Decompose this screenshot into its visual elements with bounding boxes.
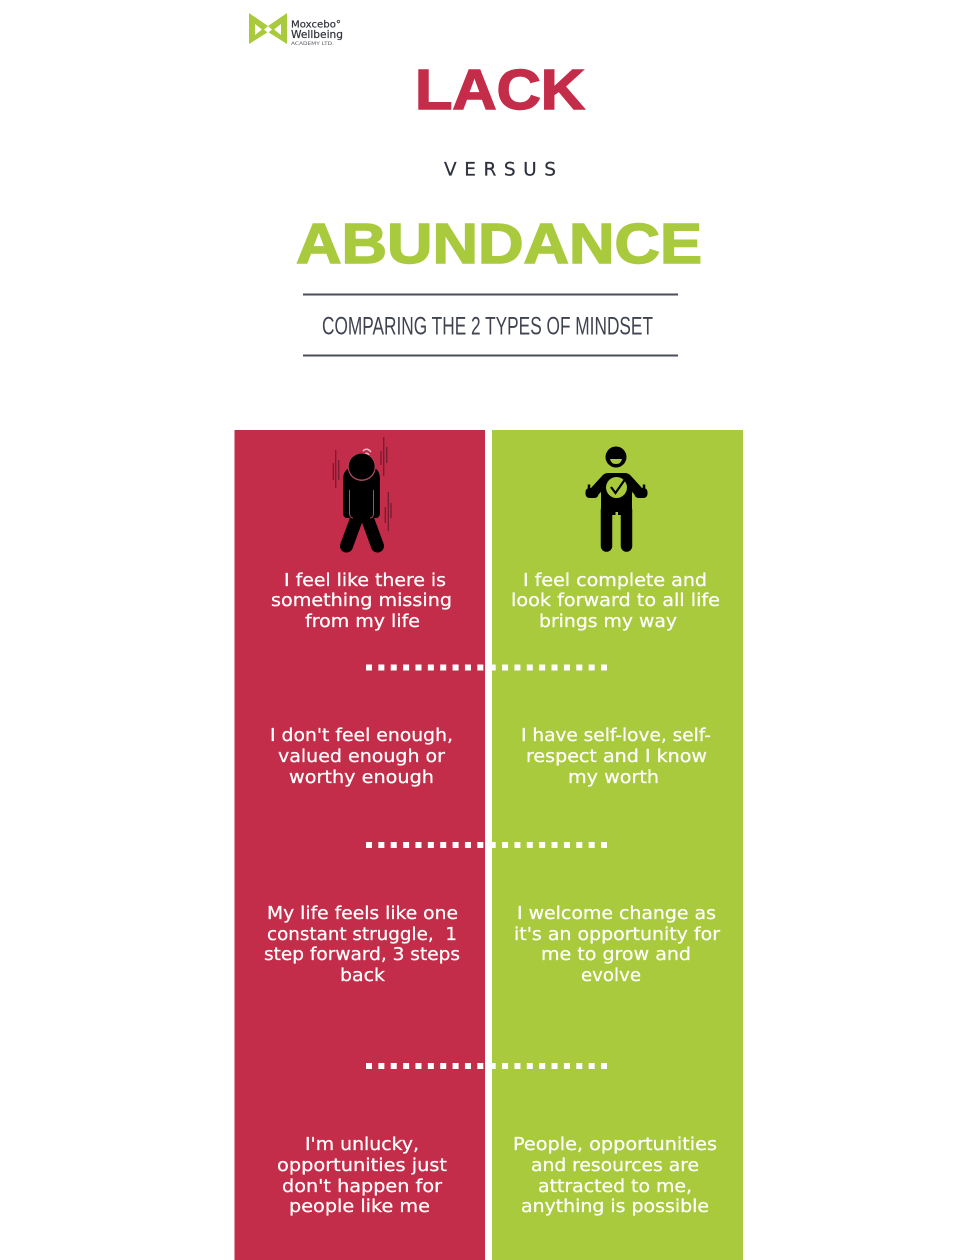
panel: abundance column: [492, 430, 743, 1260]
text: abundance statement 3: I welcome change as: [517, 904, 716, 924]
text: abundance statement 2: [521, 726, 711, 788]
text: lack statement 1: [271, 571, 452, 632]
text: abundance statement 4: [513, 1135, 717, 1217]
subtitle: COMPARING THE 2 TYPES OF MINDSET: [322, 312, 653, 340]
text: lack statement 2: valued enough or: [278, 747, 446, 767]
divider: dotted row 3: [366, 1063, 607, 1069]
text: lack statement 2: worthy enough: [289, 768, 434, 788]
text: abundance statement 4: and resources are: [531, 1156, 699, 1176]
divider: dotted row 1: [366, 664, 607, 670]
text: abundance statement 3: evolve: [581, 966, 641, 986]
text: lack statement 4: opportunities just: [277, 1156, 447, 1176]
text: lack statement 3: My life feels like one: [267, 904, 458, 924]
text: lack statement 3: step forward, 3 steps: [264, 945, 460, 965]
panel: lack column: [234, 430, 485, 1260]
text: lack statement 1: from my life: [305, 612, 420, 632]
divider: dotted row 2: [366, 842, 607, 848]
heading: VERSUS: VERSUS: [444, 160, 556, 180]
text: lack statement 2: I don't feel enough,: [270, 726, 453, 746]
text: abundance statement 1: [511, 571, 720, 632]
text: abundance statement 2: my worth: [568, 768, 659, 788]
text: abundance statement 3: it's an opportunity for: [514, 925, 721, 945]
text: abundance statement 2: I have self-love, self-: [521, 726, 711, 746]
text: abundance statement 3: [514, 904, 721, 986]
text: lack statement 1: I feel like there is: [284, 571, 446, 591]
text: lack statement 3: back: [340, 966, 386, 986]
text: abundance statement 4: attracted to me,: [538, 1177, 692, 1197]
logo: Maxcebo Wellbeing Academy: [249, 13, 343, 46]
text: lack statement 4: [277, 1135, 447, 1217]
text: abundance statement 1: I feel complete and: [523, 571, 707, 591]
text: lack statement 4: people like me: [289, 1197, 430, 1217]
text: abundance statement 2: respect and I know: [526, 747, 707, 767]
icon: happy person with check: [586, 446, 648, 554]
logo: Maxcebo Wellbeing Academy: Wellbeing: [291, 28, 343, 41]
text: abundance statement 4: People, opportunities: [513, 1135, 717, 1155]
text: abundance statement 3: me to grow and: [541, 945, 691, 965]
text: abundance statement 4: anything is possible: [521, 1197, 709, 1217]
text: abundance statement 1: look forward to all life: [511, 591, 720, 611]
title: ABUNDANCE: ABUNDANCE: [296, 212, 702, 276]
text: lack statement 4: don't happen for: [282, 1177, 443, 1197]
logo: Maxcebo Wellbeing Academy: Moxcebo°: [291, 20, 341, 30]
icon: dejected person: [333, 437, 391, 546]
text: lack statement 4: I'm unlucky,: [305, 1135, 419, 1155]
title: LACK: LACK: [415, 58, 585, 122]
text: lack statement 3: constant struggle, 1: [267, 925, 457, 945]
text: lack statement 1: something missing: [271, 591, 452, 611]
text: abundance statement 1: brings my way: [539, 612, 677, 632]
logo: Maxcebo Wellbeing Academy: ACADEMY LTD.: [291, 41, 334, 46]
text: lack statement 3: [264, 904, 460, 986]
text: lack statement 2: [270, 726, 453, 788]
